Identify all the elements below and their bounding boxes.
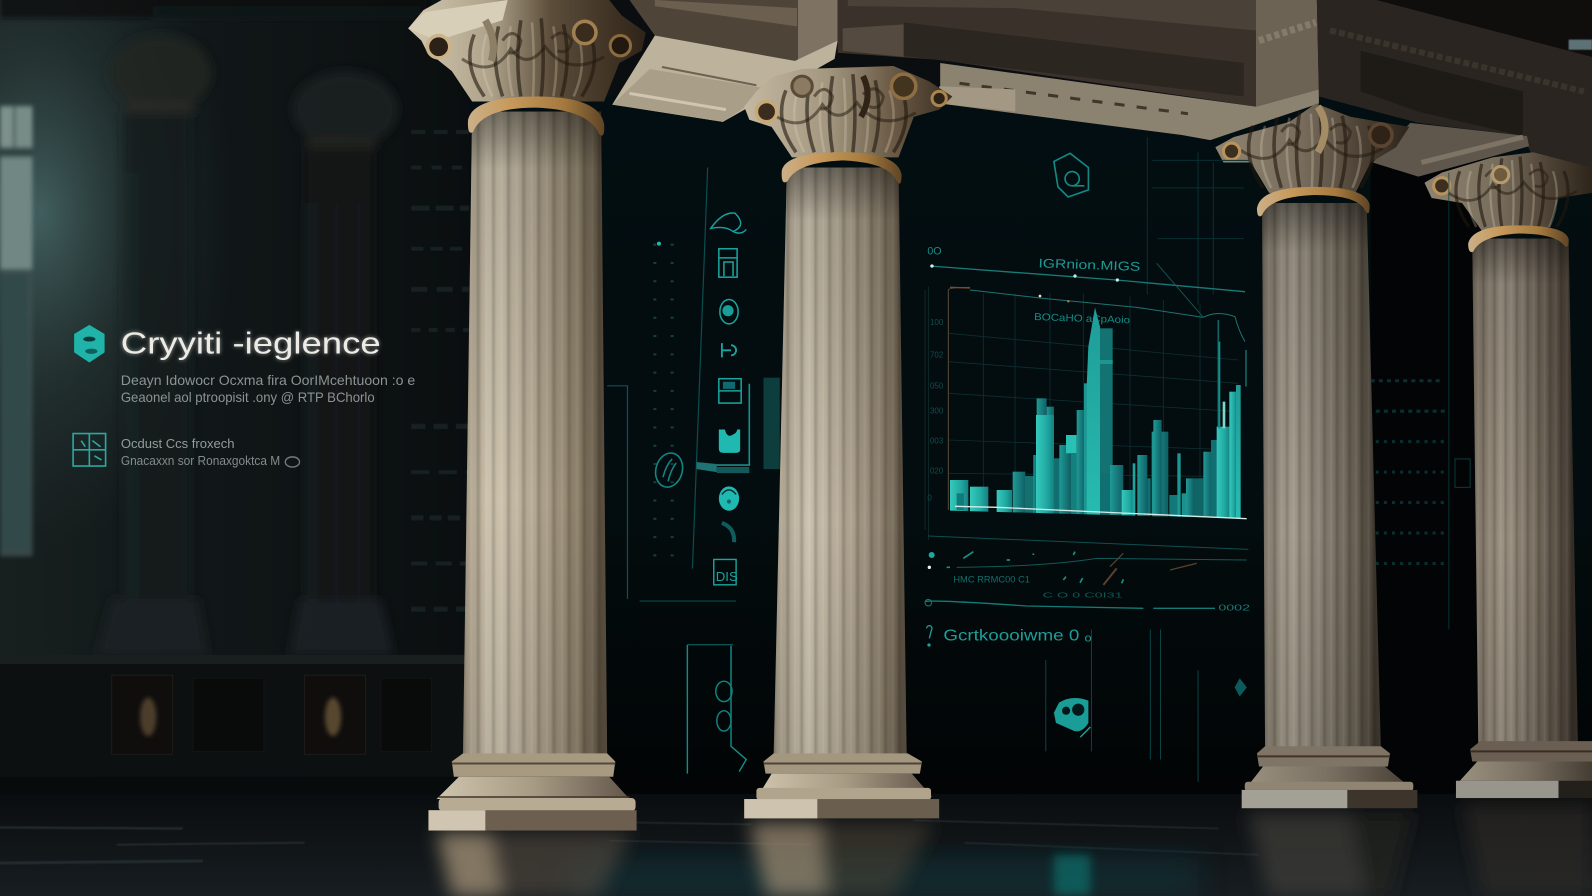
- icon: wave: [711, 213, 746, 233]
- background column left: [96, 35, 211, 655]
- chart y axis numbers: 702: [930, 350, 944, 359]
- icon: disc: [720, 300, 738, 324]
- teal floor reflection: [569, 858, 1198, 896]
- chart labels: [927, 246, 1141, 326]
- icon: hexagon logo: [74, 325, 105, 362]
- gold ring: [1257, 187, 1370, 216]
- chart y axis numbers: [927, 318, 944, 503]
- shaft: [774, 168, 907, 756]
- capital: [744, 66, 952, 157]
- left brand block: [73, 325, 415, 468]
- lines near robot: [1046, 629, 1198, 782]
- feature text: Ocdust Ccs froxech: [121, 436, 235, 451]
- icon: stand: [722, 343, 736, 357]
- chart bottom readouts: [925, 536, 1248, 608]
- chart y axis numbers: 0: [927, 494, 932, 503]
- ceiling stripes: [0, 0, 426, 18]
- base: [744, 753, 939, 818]
- gold ring: [468, 96, 604, 136]
- beam between first and second column: [612, 0, 838, 122]
- wainscot: [0, 655, 467, 797]
- description: Deayn Idowocr Ocxma fira OorIMcehtuoon :o e: [121, 373, 415, 388]
- icon: oval: [652, 450, 686, 490]
- base: [428, 753, 637, 831]
- chart small captions: C O 0 C0I31: [1043, 591, 1123, 600]
- beam between second and third column: [838, 0, 1319, 140]
- icon: filled circle: [719, 486, 739, 511]
- brick wall texture: [411, 132, 469, 609]
- icon: filled shield: [719, 429, 740, 453]
- chart baseline: [955, 506, 1247, 519]
- icon: top hexagon: [1054, 153, 1088, 197]
- column 1: [408, 0, 646, 831]
- chart grid: [925, 287, 1238, 540]
- shaft: [463, 112, 607, 756]
- chart footer label: Gcrtkoooiwme 0 ₒ: [943, 628, 1092, 645]
- icon: crescent: [722, 523, 734, 542]
- chart y axis numbers: 003: [930, 436, 944, 445]
- top screen grid: [1147, 137, 1249, 305]
- chart small captions: HMC RRMC00 C1: [953, 575, 1030, 585]
- left screen panel lines: [607, 168, 780, 774]
- gold ring: [1468, 225, 1569, 252]
- chart labels: 0O: [927, 246, 942, 258]
- base: [1242, 746, 1417, 808]
- L shaped bracket: [697, 384, 749, 473]
- chart y axis numbers: 020: [930, 466, 944, 475]
- chart y axis numbers: 050: [930, 381, 944, 390]
- chart small captions: 0002: [1218, 603, 1250, 613]
- screen lines right of column 3: [1371, 173, 1470, 629]
- feature text: [121, 436, 280, 468]
- icon: window: [719, 379, 741, 403]
- base: [1456, 741, 1592, 798]
- title: Cryyiti -ieglence: [121, 326, 381, 360]
- background column right: [289, 71, 398, 655]
- capital: [1424, 152, 1592, 231]
- description: Geaonel aol ptroopisit .ony @ RTP BChorlo: [121, 390, 375, 405]
- chart labels: IGRnion.MIGS: [1038, 256, 1141, 274]
- bar chart: [950, 307, 1241, 530]
- screen panel behind columns: [469, 96, 1592, 797]
- floor: [0, 794, 1592, 896]
- icon: labelled box: [714, 559, 738, 585]
- description: [121, 373, 415, 405]
- icon: small badge: [285, 457, 300, 467]
- teal diamond: [1235, 678, 1247, 697]
- gold ring: [782, 152, 902, 184]
- chart y axis numbers: 300: [930, 406, 944, 415]
- chart small captions: [953, 575, 1250, 613]
- entablature: [612, 0, 1592, 177]
- window glow: [0, 0, 264, 609]
- column 4: [1424, 152, 1592, 798]
- right dark screen block: [1371, 152, 1482, 792]
- beam at far right: [1317, 0, 1592, 177]
- feature text: Gnacaxxn sor Ronaxgoktca M: [121, 453, 280, 468]
- icon: document: [719, 249, 737, 277]
- chart panel: [925, 246, 1250, 647]
- shaft: [1262, 203, 1381, 749]
- chart frame: [930, 263, 1246, 513]
- icon: feature grid: [73, 434, 106, 466]
- capital: [408, 0, 646, 102]
- chart y axis numbers: 100: [930, 318, 944, 327]
- window: [0, 105, 32, 556]
- capital: [1215, 104, 1409, 193]
- column reflections: [437, 804, 1592, 896]
- chart labels: BOCaHO aCpAoio: [1034, 312, 1131, 326]
- chart footer label: [927, 626, 1092, 647]
- shaft: [1472, 239, 1578, 743]
- icon: labelled box: DIS: [716, 569, 738, 584]
- column 2: [744, 66, 952, 818]
- column 3: [1215, 104, 1417, 808]
- icon: robot head: [1054, 698, 1090, 737]
- icon column: [652, 137, 1249, 782]
